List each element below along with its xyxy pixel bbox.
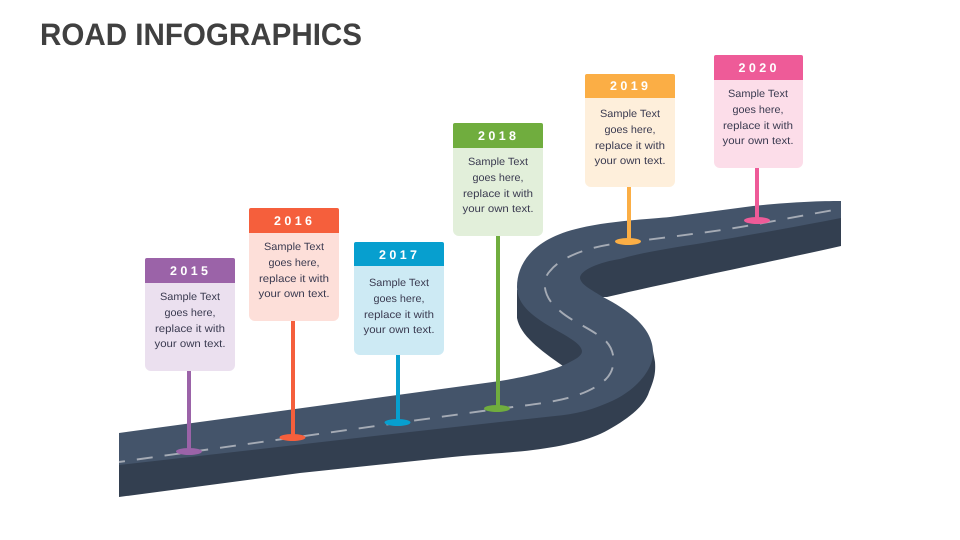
card text: replace it with bbox=[595, 140, 665, 152]
card text bbox=[722, 88, 794, 147]
card body bbox=[585, 98, 675, 187]
card text: your own text. bbox=[722, 135, 794, 147]
card body bbox=[145, 283, 235, 371]
year header bbox=[354, 242, 444, 266]
card body bbox=[249, 233, 339, 321]
card text: goes here, bbox=[268, 257, 320, 269]
card text: Sample Text bbox=[369, 277, 429, 289]
card text: Sample Text bbox=[468, 156, 528, 168]
road bbox=[119, 201, 841, 497]
card body bbox=[714, 80, 803, 168]
card: 2015 bbox=[145, 258, 235, 371]
card text: goes here, bbox=[732, 104, 784, 116]
card text bbox=[462, 156, 534, 215]
pin: 2019 bbox=[615, 187, 641, 245]
card text: goes here, bbox=[472, 172, 524, 184]
card text: goes here, bbox=[164, 307, 216, 319]
card text: your own text. bbox=[364, 324, 434, 336]
card: 2020 bbox=[714, 55, 803, 168]
card text: Sample Text bbox=[264, 241, 324, 253]
card: 2016: 2016 bbox=[274, 214, 315, 228]
card body bbox=[354, 266, 444, 355]
year header bbox=[249, 208, 339, 233]
card: 2017 bbox=[354, 242, 444, 355]
card text: your own text. bbox=[258, 288, 330, 300]
card text: Sample Text bbox=[160, 291, 220, 303]
card text bbox=[154, 291, 226, 350]
card: 2018 bbox=[453, 123, 543, 236]
card text: replace it with bbox=[155, 323, 225, 335]
card text bbox=[364, 277, 434, 336]
card: 2017: 2017 bbox=[379, 248, 420, 262]
pin: 2020 bbox=[744, 168, 770, 224]
card: 2019 bbox=[585, 74, 675, 187]
card text: goes here, bbox=[604, 124, 656, 136]
year header bbox=[145, 258, 235, 283]
pin: 2017 bbox=[384, 355, 410, 426]
card text: your own text. bbox=[154, 338, 226, 350]
road side wall bbox=[119, 212, 841, 497]
card text: your own text. bbox=[594, 155, 666, 167]
card text: replace it with bbox=[364, 309, 434, 321]
year header bbox=[585, 74, 675, 98]
card text: your own text. bbox=[462, 203, 534, 215]
card text: Sample Text bbox=[728, 88, 788, 100]
pin: 2016 bbox=[280, 321, 306, 441]
card: 2020: 2020 bbox=[738, 61, 780, 75]
card: 2019: 2019 bbox=[610, 79, 651, 93]
card text: replace it with bbox=[723, 120, 793, 132]
card text bbox=[258, 241, 330, 300]
card text: Sample Text bbox=[600, 108, 660, 120]
card text bbox=[594, 108, 666, 167]
card text: replace it with bbox=[463, 188, 533, 200]
card text: replace it with bbox=[259, 273, 329, 285]
card body bbox=[453, 148, 543, 236]
year header bbox=[453, 123, 543, 148]
card: 2015: 2015 bbox=[170, 264, 211, 278]
pin: 2015 bbox=[176, 371, 202, 455]
year header bbox=[714, 55, 803, 80]
pin: 2018 bbox=[484, 236, 510, 412]
road centre dashes bbox=[119, 209, 840, 462]
card: 2016 bbox=[249, 208, 339, 321]
card text: goes here, bbox=[374, 293, 424, 305]
card: 2018: 2018 bbox=[478, 129, 519, 143]
road surface bbox=[119, 201, 841, 465]
title: ROAD INFOGRAPHICS bbox=[40, 17, 362, 52]
